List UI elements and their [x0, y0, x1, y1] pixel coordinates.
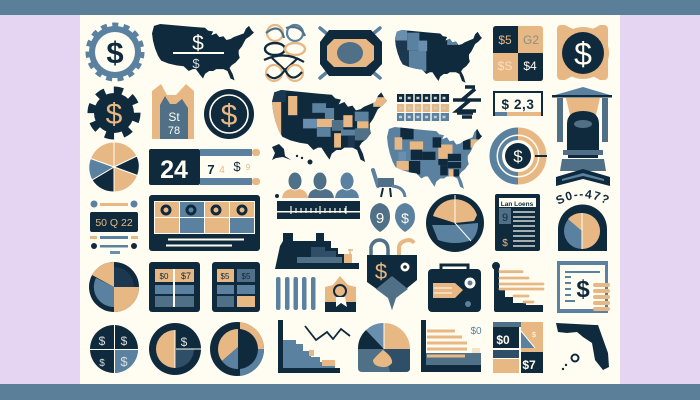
icon: framed dollar coin: $: [574, 36, 592, 72]
chart: quartered dollar circle: $: [99, 334, 106, 348]
panel: dollar sheet: $: [576, 276, 590, 303]
icon: navy gear with dollar: [91, 90, 137, 136]
panel: stacked list with value box: [90, 200, 138, 254]
chart: quartered dollar circle: $: [120, 354, 128, 369]
icon: blue gear with dollar: [88, 25, 142, 79]
chart: half tan circle: $: [181, 335, 188, 349]
chart: tan bars on navy stairs: [492, 262, 543, 312]
panel: table with tan cell: $5: [242, 272, 251, 281]
chart: four-cell dollar grid: $4: [523, 59, 537, 73]
callout: dollar amount box: $ 2,3: [501, 97, 535, 112]
chart: dome pie: [358, 323, 410, 372]
icon: navy dollar coin: $: [221, 99, 238, 132]
icon: certificate badge: [325, 276, 356, 312]
chart: tan bars with value: $0: [470, 326, 482, 337]
chart: four-cell dollar grid: G2: [523, 33, 539, 47]
chart: half tan circle: [149, 323, 201, 375]
chart: icon status grid: [397, 94, 449, 121]
icon: statement building: 78: [168, 125, 180, 137]
icon: navy dollar coin: [204, 89, 254, 139]
icon: blue gear with dollar: $: [106, 35, 124, 70]
chart: quartered dollar circle: $: [121, 334, 128, 348]
map: USA state mosaic navy: [272, 90, 387, 164]
icon: statement building: St: [168, 110, 180, 124]
panel: number 24 banner: 4: [219, 165, 225, 176]
panel: loan document: [495, 194, 540, 251]
icon: hanging tags 9 and dollar: $: [401, 210, 409, 226]
icon: five vertical bars: [276, 277, 316, 310]
icon: framed dollar coin: [557, 25, 609, 80]
icon: statement building: [152, 84, 194, 139]
icon: ornamental knot: [264, 25, 305, 81]
map: navy USA with dollar: $: [192, 32, 204, 55]
panel: dollar mosaic blocks: [493, 322, 543, 373]
panel: number 24 banner: 9: [246, 163, 251, 172]
panel: loan document: Lan Loens: [501, 201, 534, 208]
callout: dollar amount box: [493, 91, 543, 116]
icon: briefcase with tag: [428, 265, 481, 312]
chart: four-cell dollar grid: $5: [498, 33, 512, 47]
chart: quartered dollar circle: $: [99, 358, 105, 369]
panel: dollar sheet: [557, 261, 608, 313]
panel: number 24 banner: 24: [160, 156, 188, 184]
chart: tan bars with value: [421, 320, 482, 372]
panel: table with tan cell: [212, 262, 260, 312]
chart: four-cell dollar grid: $S: [498, 59, 512, 73]
icon: padlock price tag: [367, 240, 417, 310]
icon: chair: [373, 170, 405, 197]
panel: dollar mosaic blocks: $7: [522, 358, 536, 372]
chart: four-cell dollar grid: [493, 26, 543, 81]
panel: table with dollar headers: [149, 262, 200, 312]
chart: descending stairs with zigzag: [278, 320, 350, 373]
top band: [0, 0, 700, 15]
icon: three people over ruler: [275, 172, 360, 219]
panel: dollar mosaic blocks: $: [532, 332, 536, 339]
panel: dollar mosaic blocks: $0: [496, 333, 510, 347]
icon: hanging tags 9 and dollar: [370, 203, 415, 232]
panel: loan document: $: [502, 238, 508, 249]
chart: quartered dollar circle: [90, 325, 138, 373]
icon: padlock price tag: $: [375, 259, 387, 284]
chart: concentric dollar ring: $: [513, 147, 523, 166]
panel: dashboard screen: [149, 195, 260, 251]
panel: table with tan cell: $5: [221, 272, 230, 281]
map: Florida: [556, 323, 609, 370]
map: navy USA with dollar: $: [192, 56, 200, 71]
panel: number 24 banner: [149, 149, 260, 185]
panel: number 24 banner: $: [233, 159, 241, 174]
icon: large block dollar sign: [453, 87, 481, 117]
map: navy USA with dollar: [152, 24, 254, 80]
chart: pie five slices: [89, 142, 139, 192]
map: USA multicolour mosaic: [387, 127, 482, 189]
icon: navy gear with dollar: $: [106, 98, 123, 131]
bottom band: [0, 384, 700, 400]
map: USA blue west navy east: [395, 30, 482, 83]
panel: number 24 banner: 7: [207, 162, 215, 177]
icon: castle steps: [275, 233, 359, 269]
panel: table with dollar headers: $7: [181, 271, 191, 281]
cream panel: [80, 15, 620, 384]
chart: pie in navy ring: [426, 194, 484, 252]
chart: pie tan navy blue: [89, 262, 139, 312]
chart: concentric dollar ring: [493, 131, 547, 181]
panel: stacked list with value box: 50 Q 22: [95, 217, 133, 229]
icon: monument pedestal: [552, 87, 612, 186]
icon: hanging tags 9 and dollar: 9: [376, 210, 384, 227]
icon: banknote ornament: [320, 28, 382, 78]
chart: ring pie: [210, 322, 264, 376]
panel: loan document: 9: [502, 212, 508, 224]
chart: arch pie with label: [556, 190, 609, 251]
panel: table with dollar headers: $0: [160, 272, 169, 281]
chart: arch pie with label: S0--47?: [556, 190, 609, 204]
